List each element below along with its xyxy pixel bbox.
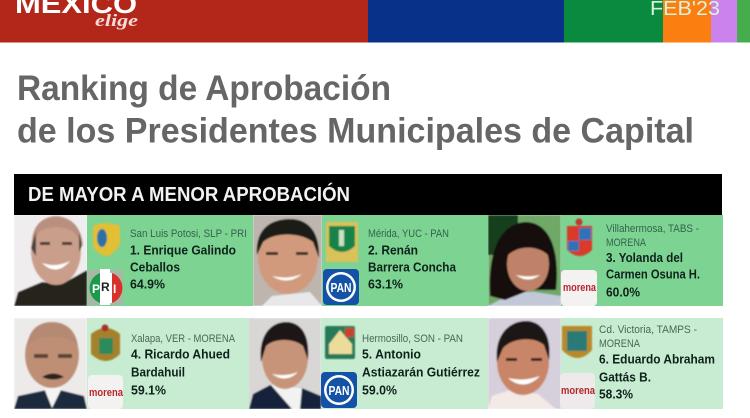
card 3 text: Carmen Osuna H. — [606, 266, 700, 282]
emblem: San Luis Potosí — [93, 223, 120, 256]
logo: Morena — [561, 270, 597, 306]
emblem: Tabasco — [567, 218, 592, 256]
emblem: Veracruz — [91, 324, 120, 361]
card 2 text — [368, 228, 457, 292]
header colour band — [0, 0, 750, 42]
logo: Morena: morena — [89, 387, 124, 399]
card 5 text: 59.0% — [362, 382, 397, 398]
card 2: Renán Barrera — [253, 215, 488, 306]
card 6 text: Gattás B. — [599, 370, 651, 384]
card 6: Eduardo Gattás — [488, 318, 723, 409]
card 3 text: Villahermosa, TABS - — [606, 223, 699, 235]
card 2 text: Mérida, YUC - PAN — [368, 228, 449, 240]
title: de los Presidentes Municipales de Capital — [17, 112, 694, 150]
card 4 text: 4. Ricardo Ahued — [131, 346, 230, 362]
card 6 text: 6. Eduardo Abraham — [599, 352, 715, 366]
card 3 text — [606, 223, 700, 300]
photo 4 — [14, 318, 87, 409]
card 4 text: 59.1% — [131, 382, 166, 398]
card 1 text: San Luis Potosi, SLP - PRI — [130, 228, 247, 240]
card 1 text: 64.9% — [130, 276, 165, 292]
card 4 text: Bardahuil — [131, 364, 185, 380]
card 2 text: 63.1% — [368, 276, 403, 292]
card 6 text: Cd. Victoria, TAMPS - — [599, 324, 697, 336]
card 5 text: 5. Antonio — [362, 346, 421, 362]
card 3 text: MORENA — [606, 237, 647, 249]
emblem: Tamaulipas — [562, 326, 592, 358]
logo: PRI: P — [92, 282, 100, 296]
card 1 text — [130, 228, 247, 292]
emblem: Mérida — [326, 222, 358, 262]
card 2 text: 2. Renán — [368, 242, 418, 258]
card 1 text: Ceballos — [130, 260, 180, 274]
logo: PAN: PAN — [330, 280, 352, 295]
photo 3 — [488, 215, 561, 306]
card 1 text: 1. Enrique Galindo — [130, 242, 236, 258]
photo 5 — [249, 318, 321, 409]
card 6 text — [599, 324, 715, 402]
emblem: Hermosillo — [325, 326, 355, 359]
card 6 text: MORENA — [599, 338, 641, 350]
card 3 text: 3. Yolanda del — [606, 250, 683, 265]
logo: Morena — [560, 373, 596, 409]
section heading bar: DE MAYOR A MENOR APROBACIÓN — [28, 182, 350, 206]
logo: Morena — [88, 375, 124, 409]
logo: PRI: I — [113, 282, 116, 296]
card 1: Enrique Galindo — [14, 215, 253, 306]
photo 6 — [488, 318, 561, 409]
card 4 text — [131, 333, 236, 398]
card 2 text: Barrera Concha — [368, 260, 457, 274]
logo: PAN: PAN — [328, 383, 350, 398]
card 5 text — [362, 333, 480, 398]
card 3: Yolanda Osuna — [488, 215, 723, 306]
title: Ranking de Aprobación — [17, 69, 391, 108]
logo: Morena: morena — [563, 282, 597, 294]
title — [17, 69, 694, 150]
photo 2 — [253, 215, 322, 306]
logo: PRI: R — [101, 280, 110, 294]
logo: PRI — [88, 269, 123, 305]
card 6 text: 58.3% — [599, 386, 633, 402]
card 3 text: 60.0% — [606, 284, 640, 300]
logo: México elige — [15, 0, 139, 30]
card 5 text: Astiazarán Gutiérrez — [362, 364, 480, 380]
logo: PAN — [323, 269, 359, 305]
logo: México elige: elige — [95, 11, 139, 30]
logo: Morena: morena — [561, 385, 596, 397]
photo 1 — [14, 215, 87, 306]
logo: PAN — [321, 372, 357, 408]
card 5 text: Hermosillo, SON - PAN — [362, 333, 463, 345]
card 5: Antonio Astiazarán — [249, 318, 488, 409]
section heading bar — [14, 174, 722, 215]
card 4: Ricardo Ahued — [14, 318, 253, 409]
card 4 text: Xalapa, VER - MORENA — [131, 333, 236, 345]
